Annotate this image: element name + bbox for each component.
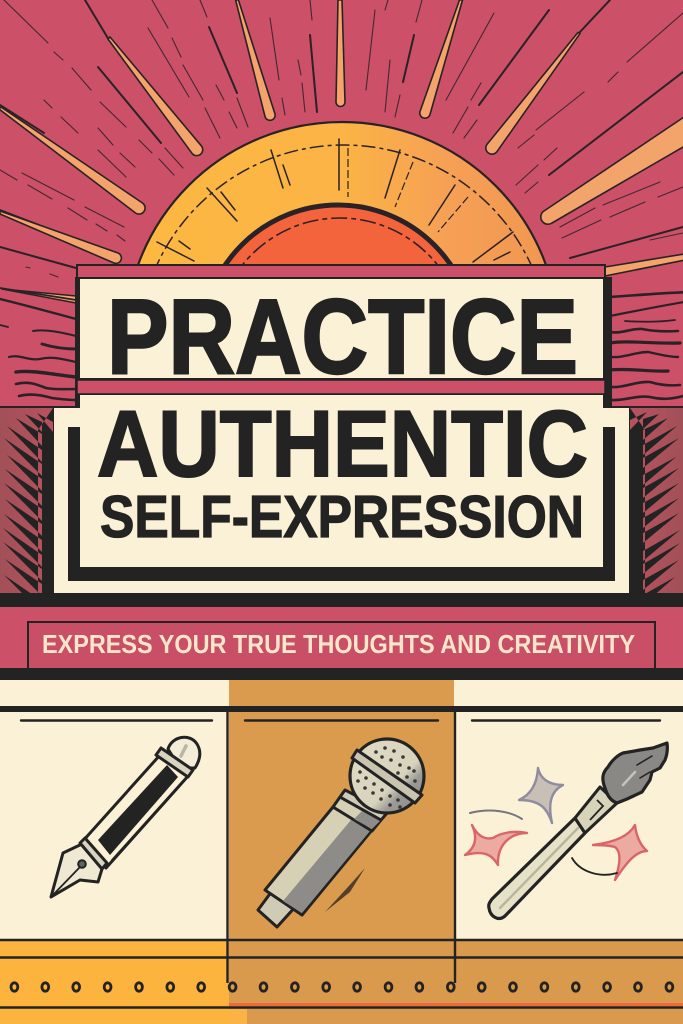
mic head band	[352, 750, 422, 803]
inner sun	[202, 205, 474, 477]
mic body shade	[283, 820, 370, 913]
horizontal top rule	[0, 706, 683, 712]
red sparkle left	[465, 825, 527, 865]
grey sparkle	[519, 768, 563, 823]
outer sun disc	[125, 122, 559, 556]
black band above subtitle	[0, 593, 683, 608]
mic neck	[333, 797, 381, 831]
red sparkle right	[593, 825, 647, 880]
wavy lines right	[610, 292, 683, 400]
tool panels	[0, 680, 683, 940]
icon: paint brush with sparkles	[465, 743, 667, 918]
icon: fountain pen	[51, 737, 200, 897]
thick dark ray lines	[0, 0, 683, 268]
heading word: practice: PRACTICE	[107, 278, 578, 396]
pen cap highlight	[181, 746, 186, 756]
mic end cap	[258, 891, 296, 927]
inner dashed arc	[215, 218, 465, 468]
black arc	[572, 858, 617, 875]
pen top band	[156, 748, 193, 777]
hatch spikes right	[627, 408, 680, 605]
orange accent line	[229, 1003, 683, 1006]
brush ferrule	[575, 787, 617, 833]
heading word: authentic: AUTHENTIC	[97, 391, 588, 496]
orange strip	[229, 940, 683, 1024]
top red band	[77, 265, 605, 278]
pen nib	[51, 844, 102, 897]
cream panel upper	[80, 279, 603, 378]
bristle highlight	[623, 772, 635, 785]
sun tick marks	[157, 139, 513, 262]
sun dashed tick marks	[348, 148, 468, 232]
red divider band	[77, 380, 605, 394]
heading word: self-expression: SELF-EXPRESSION	[100, 484, 584, 550]
red band	[0, 607, 683, 668]
peach rays	[0, 0, 683, 303]
hatched band left	[0, 407, 56, 613]
handle highlight	[500, 828, 578, 908]
yellow patch bottom	[229, 1009, 247, 1024]
pen cap	[168, 737, 200, 768]
nib hole	[78, 860, 86, 868]
pen stripe	[98, 765, 178, 855]
icon: microphone	[258, 739, 424, 927]
mic body	[265, 807, 372, 915]
short rules	[21, 719, 660, 722]
row of rings	[11, 983, 673, 991]
pen barrel inner line	[112, 781, 183, 860]
panel cream	[0, 680, 683, 940]
wavy lines left	[0, 288, 76, 400]
subtitle box	[28, 622, 655, 670]
pen barrel	[82, 755, 189, 868]
pen collar	[80, 838, 107, 869]
subtitle text: EXPRESS YOUR TRUE THOUGHTS AND CREATIVITY	[42, 629, 635, 659]
title panel	[54, 265, 629, 593]
bottom strip	[0, 940, 683, 1024]
grey arc	[470, 811, 522, 819]
subtitle banner	[0, 607, 683, 670]
hatched band right	[627, 407, 683, 605]
brush head	[603, 743, 667, 803]
black band below subtitle	[0, 668, 683, 680]
black frame upper	[75, 277, 612, 409]
strip lines	[0, 940, 683, 1008]
outer cream frame	[54, 408, 629, 593]
separator line above hatching	[0, 406, 683, 408]
vertical column dividers	[228, 709, 455, 983]
sun	[125, 122, 559, 557]
mic head	[350, 739, 424, 813]
hatch spikes left	[3, 408, 56, 613]
sunburst rays	[0, 0, 683, 303]
ferrule notch	[590, 800, 603, 820]
brush handle	[489, 818, 585, 918]
mic collar	[340, 790, 388, 820]
bristle strokes	[637, 756, 652, 778]
background	[0, 0, 683, 410]
mic spark	[325, 868, 365, 912]
thin dark ray lines	[0, 0, 683, 277]
mic grille dots	[356, 746, 417, 809]
yellow strip	[0, 940, 229, 1024]
inner black frame	[68, 427, 615, 581]
dashed arc	[138, 145, 550, 557]
mic neck shade	[354, 811, 380, 829]
pen slit	[51, 867, 80, 897]
cream panel lower	[80, 395, 603, 567]
panel orange	[229, 680, 454, 940]
